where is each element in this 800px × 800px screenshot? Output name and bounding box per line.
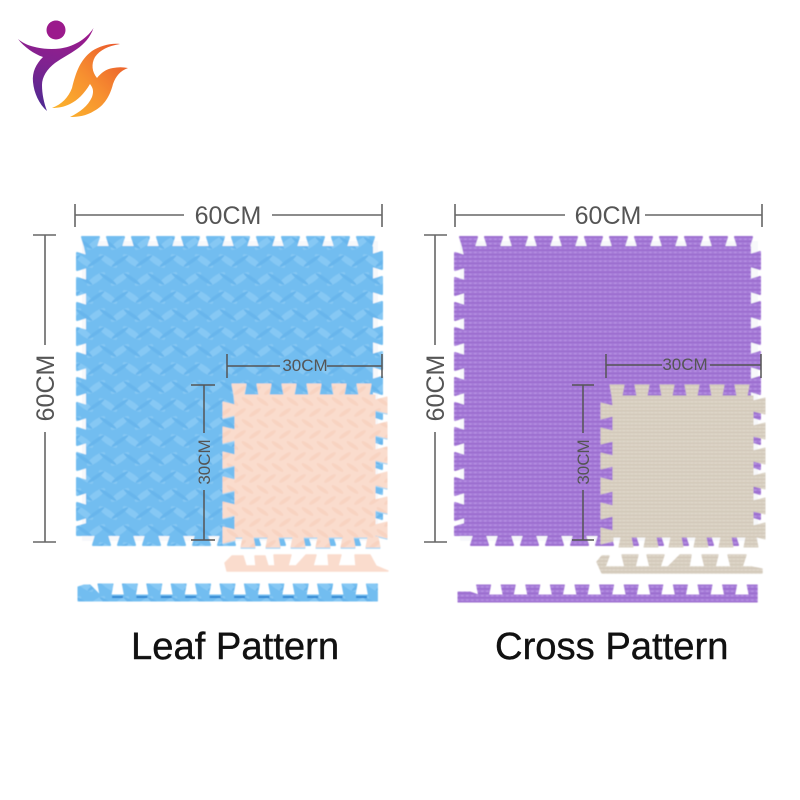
left mat 60cm width dimension: 60CM xyxy=(195,202,261,230)
left mat 30cm height dimension: 30CM xyxy=(195,439,214,485)
caption: leaf pattern: Leaf Pattern xyxy=(131,625,339,668)
purple edge strip xyxy=(458,585,757,602)
right mat 60cm width dimension xyxy=(455,202,762,230)
logo xyxy=(18,20,128,117)
right mat 30cm width dimension xyxy=(606,354,761,378)
left mat 60cm height dimension xyxy=(32,235,60,542)
right mat 60cm height dimension: 60CM xyxy=(422,355,450,421)
right mat 30cm height dimension: 30CM xyxy=(574,439,593,485)
peach 30cm tile xyxy=(223,384,387,547)
strip dark edge xyxy=(112,596,376,598)
left mat 60cm height dimension: 60CM xyxy=(32,355,60,421)
right mat: cross pattern xyxy=(455,237,765,602)
right mat 60cm width dimension: 60CM xyxy=(575,202,641,230)
right mat 30cm height dimension xyxy=(572,385,594,540)
left mat 30cm width dimension xyxy=(227,354,382,378)
logo: person head xyxy=(46,20,66,40)
caption: cross pattern: Cross Pattern xyxy=(495,625,728,668)
left mat 30cm height dimension xyxy=(191,385,215,540)
left mat 30cm width dimension: 30CM xyxy=(282,356,328,375)
logo: person body xyxy=(18,28,94,111)
purple 60cm tile xyxy=(455,237,760,545)
beige 30cm tile xyxy=(601,385,765,547)
left mat: leaf pattern xyxy=(77,237,388,601)
left mat 60cm width dimension xyxy=(75,202,382,230)
blue edge strip xyxy=(78,584,377,601)
beige edge strip xyxy=(597,555,762,573)
right mat 30cm width dimension: 30CM xyxy=(662,355,708,374)
peach 30cm tile shadow xyxy=(223,385,387,548)
logo: flame H mark xyxy=(52,44,128,117)
peach edge strip xyxy=(225,555,388,571)
blue 60cm tile xyxy=(77,237,382,545)
right mat 60cm height dimension xyxy=(422,235,450,542)
